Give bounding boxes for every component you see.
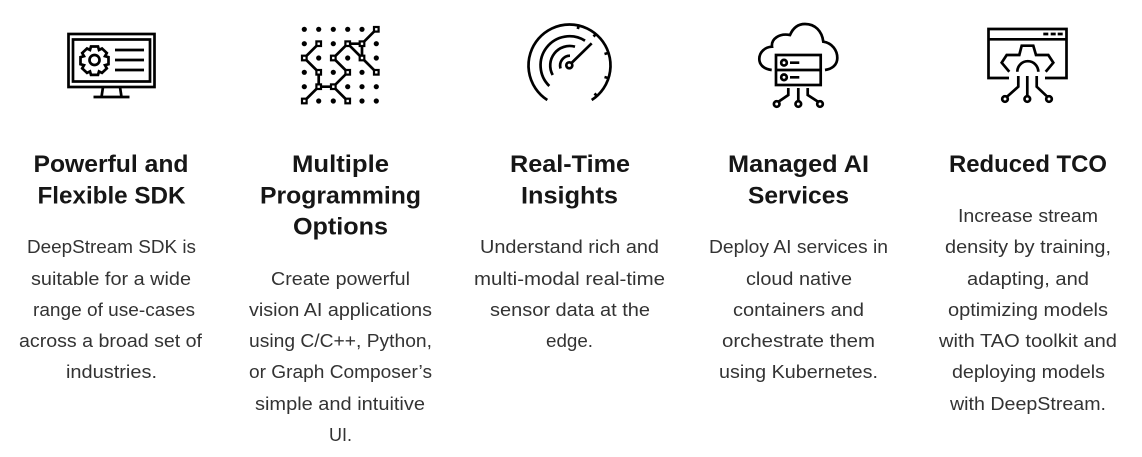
body text: using C/C++, Python, — [249, 331, 432, 351]
heading — [34, 151, 188, 210]
heading — [510, 151, 630, 210]
body text: with TAO toolkit and — [938, 331, 1117, 351]
body text: suitable for a wide — [31, 269, 191, 289]
body text — [938, 206, 1117, 414]
icon: monitor with gear — [68, 34, 154, 97]
body text: across a broad set of — [19, 331, 203, 351]
body text: cloud native — [746, 269, 852, 289]
heading: Options — [293, 214, 388, 240]
body text: Deploy AI services in — [709, 237, 888, 257]
heading: Flexible SDK — [38, 182, 186, 210]
heading: Real-Time — [510, 151, 630, 178]
heading — [260, 151, 421, 240]
heading: Managed AI — [728, 151, 869, 178]
icon: cloud server — [759, 24, 837, 107]
body text: industries. — [66, 362, 157, 382]
panel: reduced TCO — [938, 29, 1117, 414]
panel: multiple programming options — [249, 27, 432, 445]
heading: Multiple — [292, 151, 389, 178]
body text: edge. — [546, 331, 593, 351]
body text: vision AI applications — [249, 300, 432, 320]
body text: simple and intuitive — [255, 394, 425, 414]
body text: Create powerful — [271, 269, 410, 289]
panel: managed AI services — [709, 24, 888, 382]
body text — [249, 269, 432, 445]
body text: multi-modal real-time — [474, 269, 665, 289]
body text: with DeepStream. — [949, 394, 1106, 414]
body text — [709, 237, 888, 382]
icon: radar gauge — [528, 25, 610, 100]
icon: dot grid network — [302, 27, 379, 104]
body text: deploying models — [952, 362, 1105, 382]
body text: DeepStream SDK is — [27, 237, 196, 257]
panel: real-time insights — [474, 25, 665, 351]
panel: powerful and flexible SDK — [19, 34, 203, 382]
body text: UI. — [329, 425, 352, 445]
body text: density by training, — [945, 237, 1111, 257]
heading: Reduced TCO — [949, 151, 1107, 178]
heading: Programming — [260, 182, 421, 210]
body text: Understand rich and — [480, 237, 659, 257]
body text: sensor data at the — [490, 300, 650, 320]
body text — [19, 237, 203, 382]
body text: containers and — [733, 300, 864, 320]
heading: Insights — [521, 182, 618, 210]
body text: range of use-cases — [33, 300, 195, 320]
heading: Powerful and — [34, 151, 188, 178]
body text — [474, 237, 665, 351]
heading — [728, 151, 869, 210]
body text: using Kubernetes. — [719, 362, 878, 382]
icon: browser window with gear — [988, 29, 1066, 102]
body text: optimizing models — [948, 300, 1108, 320]
body text: adapting, and — [967, 269, 1089, 289]
heading: Services — [748, 182, 849, 210]
body text: orchestrate them — [722, 331, 875, 351]
body text: or Graph Composer’s — [249, 362, 432, 382]
body text: Increase stream — [958, 206, 1098, 226]
